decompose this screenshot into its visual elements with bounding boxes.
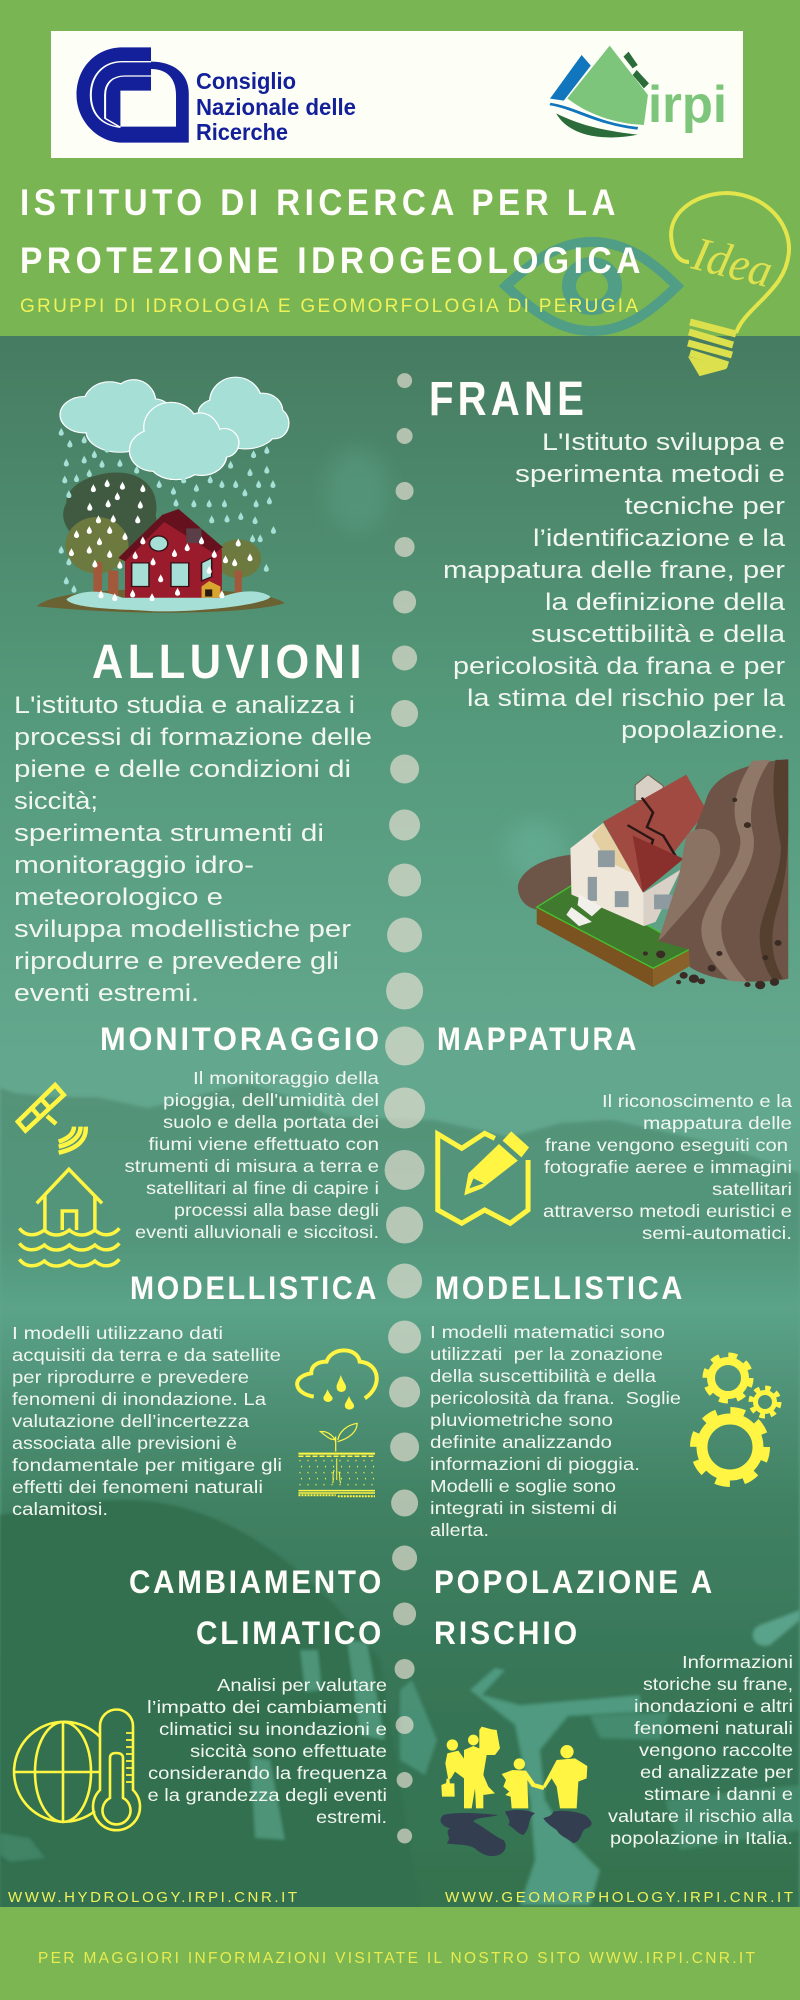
- text: modellistica description: acquisiti da terra e da satellite: [12, 1345, 281, 1365]
- panel: monitoraggio: [18, 1021, 382, 1266]
- text: mappatura description: satellitari: [712, 1179, 792, 1199]
- text: popolazione description: Informazioni: [682, 1652, 793, 1672]
- text: popolazione description: popolazione in Italia.: [610, 1828, 793, 1848]
- logo: IRPI: irpi: [648, 76, 727, 134]
- text: frane description: sperimenta metodi e: [515, 461, 785, 488]
- text: cambiamento climatico description: climatici su inondazioni e: [159, 1719, 387, 1739]
- text: monitoraggio description: suolo e della portata dei: [163, 1112, 379, 1132]
- text: mappatura description: semi-automatici.: [642, 1223, 792, 1243]
- text: frane description: L'Istituto sviluppa e: [542, 429, 785, 456]
- icon: house hit by landslide: [518, 759, 788, 989]
- logo text: Consiglio Nazionale delle Ricerche: [196, 68, 356, 145]
- heading: cambiamento climatico: CLIMATICO: [196, 1615, 384, 1651]
- text: alluvioni description: processi di formazione delle: [14, 724, 372, 751]
- text: popolazione description: valutare il rischio alla: [608, 1806, 793, 1826]
- text: alluvioni description: siccità;: [14, 788, 98, 815]
- text: alluvioni description: sperimenta strumenti di: [14, 820, 324, 847]
- text: modellistica description: I modelli matematici sono: [430, 1322, 665, 1342]
- panel: alluvioni: [14, 636, 372, 1007]
- text: mappatura description: attraverso metodi euristici e: [543, 1201, 792, 1221]
- text: frane description: popolazione.: [621, 717, 785, 744]
- text: popolazione description: stimare i danni e: [644, 1784, 793, 1804]
- text: mappatura description: Il riconoscimento e la: [602, 1091, 792, 1111]
- heading: monitoraggio: MONITORAGGIO: [100, 1021, 382, 1057]
- panel: frane: [429, 373, 786, 744]
- icon: map and pencil: [438, 1131, 529, 1223]
- heading: popolazione a rischio: POPOLAZIONE A: [434, 1564, 715, 1600]
- icon: gears: [695, 1356, 779, 1482]
- background: mountain landscape: [0, 336, 800, 1910]
- text: modellistica description: associata alle previsioni è: [12, 1433, 237, 1453]
- text: popolazione description: storiche su frane,: [643, 1674, 793, 1694]
- panel: modellistica geomorfologia: [430, 1270, 779, 1540]
- logo text: Consiglio Nazionale delle Ricerche: Nazionale delle: [196, 94, 356, 120]
- heading: frane: FRANE: [429, 373, 588, 426]
- icon: plant in soil: [298, 1423, 375, 1496]
- text: modellistica description: [430, 1322, 681, 1540]
- text: frane description: tecniche per: [624, 493, 785, 520]
- text: alluvioni description: sviluppa modellistiche per: [14, 916, 351, 943]
- icon: lightbulb idea: Idea: [686, 227, 778, 298]
- panel: cambiamento climatico: [14, 1564, 387, 1830]
- text: modellistica description: per riprodurre e prevedere: [12, 1367, 249, 1387]
- heading: popolazione a rischio: RISCHIO: [434, 1615, 580, 1651]
- text: mappatura description: mappatura delle: [643, 1113, 792, 1133]
- text: modellistica description: calamitosi.: [12, 1499, 108, 1519]
- icon: family in flood water: [441, 1727, 592, 1856]
- text: frane description: la definizione della: [545, 589, 786, 616]
- text: alluvioni description: meteorologico e: [14, 884, 223, 911]
- icon: lightbulb idea: [671, 193, 789, 375]
- text: alluvioni description: eventi estremi.: [14, 980, 199, 1007]
- text: modellistica description: pluviometriche sono: [430, 1410, 613, 1430]
- title: ISTITUTO DI RICERCA PER LA: [20, 182, 620, 223]
- text: monitoraggio description: satellitari al fine di capire i: [146, 1178, 379, 1198]
- heading: mappatura: MAPPATURA: [437, 1021, 639, 1057]
- text: popolazione description: vengono raccolte: [639, 1740, 793, 1760]
- text: monitoraggio description: pioggia, dell'umidità del: [163, 1090, 379, 1110]
- text: alluvioni description: riprodurre e prevedere gli: [14, 948, 339, 975]
- text: cambiamento climatico description: considerando la frequenza: [148, 1763, 387, 1783]
- text: monitoraggio description: [124, 1068, 379, 1242]
- text: cambiamento climatico description: [147, 1675, 387, 1827]
- text: cambiamento climatico description: Analisi per valutare: [217, 1675, 387, 1695]
- text: cambiamento climatico description: l’impatto dei cambiamenti: [147, 1697, 387, 1717]
- text: cambiamento climatico description: estremi.: [316, 1807, 387, 1827]
- panel: modellistica idrologia: [12, 1270, 379, 1519]
- text: modellistica description: valutazione dell’incertezza: [12, 1411, 249, 1431]
- text: monitoraggio description: processi alla base degli: [174, 1200, 379, 1220]
- title: PROTEZIONE IDROGEOLOGICA: [20, 240, 645, 281]
- heading: cambiamento climatico: [129, 1564, 384, 1651]
- icon: eye: [506, 242, 677, 331]
- link: geomorphology site: WWW.GEOMORPHOLOGY.IRPI.CNR.IT: [445, 1889, 793, 1906]
- text: mappatura description: fotografie aeree e immagini: [544, 1157, 792, 1177]
- header band: [0, 0, 800, 336]
- logo: IRPI: [550, 46, 727, 137]
- footer band: [0, 1907, 800, 2000]
- heading: popolazione a rischio: [434, 1564, 715, 1651]
- text: alluvioni description: [14, 692, 372, 1007]
- icon: rain cloud: [297, 1350, 377, 1410]
- text: modellistica description: definite analizzando: [430, 1432, 612, 1452]
- text: monitoraggio description: strumenti di misura a terra e: [124, 1156, 379, 1176]
- subtitle: GRUPPI DI IDROLOGIA E GEOMORFOLOGIA DI PERUGIA: [20, 296, 638, 317]
- text: monitoraggio description: fiumi viene effettuato con: [148, 1134, 379, 1154]
- panel: popolazione a rischio: [434, 1564, 793, 1856]
- link: hydrology site: WWW.HYDROLOGY.IRPI.CNR.IT: [8, 1889, 297, 1906]
- text: monitoraggio description: Il monitoraggio della: [193, 1068, 379, 1088]
- text: modellistica description: Modelli e soglie sono: [430, 1476, 616, 1496]
- text: modellistica description: fondamentale per mitigare gli: [12, 1455, 282, 1475]
- text: cambiamento climatico description: siccità sono effettuate: [190, 1741, 387, 1761]
- text: modellistica description: allerta.: [430, 1520, 489, 1540]
- text: frane description: l’identificazione e la: [533, 525, 786, 552]
- title: [20, 182, 645, 281]
- text: alluvioni description: monitoraggio idro-: [14, 852, 254, 879]
- heading: cambiamento climatico: CAMBIAMENTO: [129, 1564, 384, 1600]
- text: modellistica description: [12, 1323, 282, 1519]
- heading: modellistica: MODELLISTICA: [130, 1270, 379, 1306]
- text: modellistica description: integrati in sistemi di: [430, 1498, 617, 1518]
- text: alluvioni description: piene e delle condizioni di: [14, 756, 351, 783]
- text: mappatura description: [543, 1091, 792, 1243]
- text: mappatura description: frane vengono eseguiti con: [545, 1135, 788, 1155]
- icon: flooded house in the rain: [37, 378, 288, 613]
- logo text: Consiglio Nazionale delle Ricerche: Ricerche: [196, 119, 288, 145]
- footer text: PER MAGGIORI INFORMAZIONI VISITATE IL NOSTRO SITO WWW.IRPI.CNR.IT: [38, 1950, 756, 1967]
- text: modellistica description: pericolosità da frana. Soglie: [430, 1388, 681, 1408]
- text: modellistica description: della suscettibilità e della: [430, 1366, 656, 1386]
- text: monitoraggio description: eventi alluvionali e siccitosi.: [135, 1222, 379, 1242]
- text: popolazione description: ed analizzate per: [640, 1762, 793, 1782]
- icon: flooded house: [19, 1169, 119, 1266]
- text: popolazione description: fenomeni naturali: [634, 1718, 793, 1738]
- text: modellistica description: effetti dei fenomeni naturali: [12, 1477, 263, 1497]
- panel: mappatura: [437, 1021, 792, 1243]
- text: modellistica description: fenomeni di inondazione. La: [12, 1389, 266, 1409]
- text: modellistica description: utilizzati per la zonazione: [430, 1344, 663, 1364]
- text: frane description: mappatura delle frane, per: [443, 557, 785, 584]
- text: popolazione description: inondazioni e altri: [634, 1696, 793, 1716]
- text: frane description: [443, 429, 786, 744]
- heading: modellistica: MODELLISTICA: [435, 1270, 685, 1306]
- logo text: Consiglio Nazionale delle Ricerche: Consiglio: [196, 68, 296, 94]
- logo: CNR: [77, 47, 189, 143]
- heading: alluvioni: ALLUVIONI: [92, 636, 366, 689]
- logo panel: [51, 31, 743, 158]
- text: frane description: la stima del rischio per la: [467, 685, 786, 712]
- icon: satellite: [18, 1085, 86, 1153]
- text: popolazione description: [608, 1652, 793, 1848]
- text: frane description: suscettibilità e della: [531, 621, 786, 648]
- text: cambiamento climatico description: e la grandezza degli eventi: [148, 1785, 387, 1805]
- timeline dots: [384, 373, 425, 1844]
- icon: globe and thermometer: [14, 1710, 140, 1830]
- text: frane description: pericolosità da frana e per: [453, 653, 785, 680]
- text: modellistica description: informazioni di pioggia.: [430, 1454, 640, 1474]
- text: alluvioni description: L'istituto studia e analizza i: [14, 692, 355, 719]
- text: modellistica description: I modelli utilizzano dati: [12, 1323, 223, 1343]
